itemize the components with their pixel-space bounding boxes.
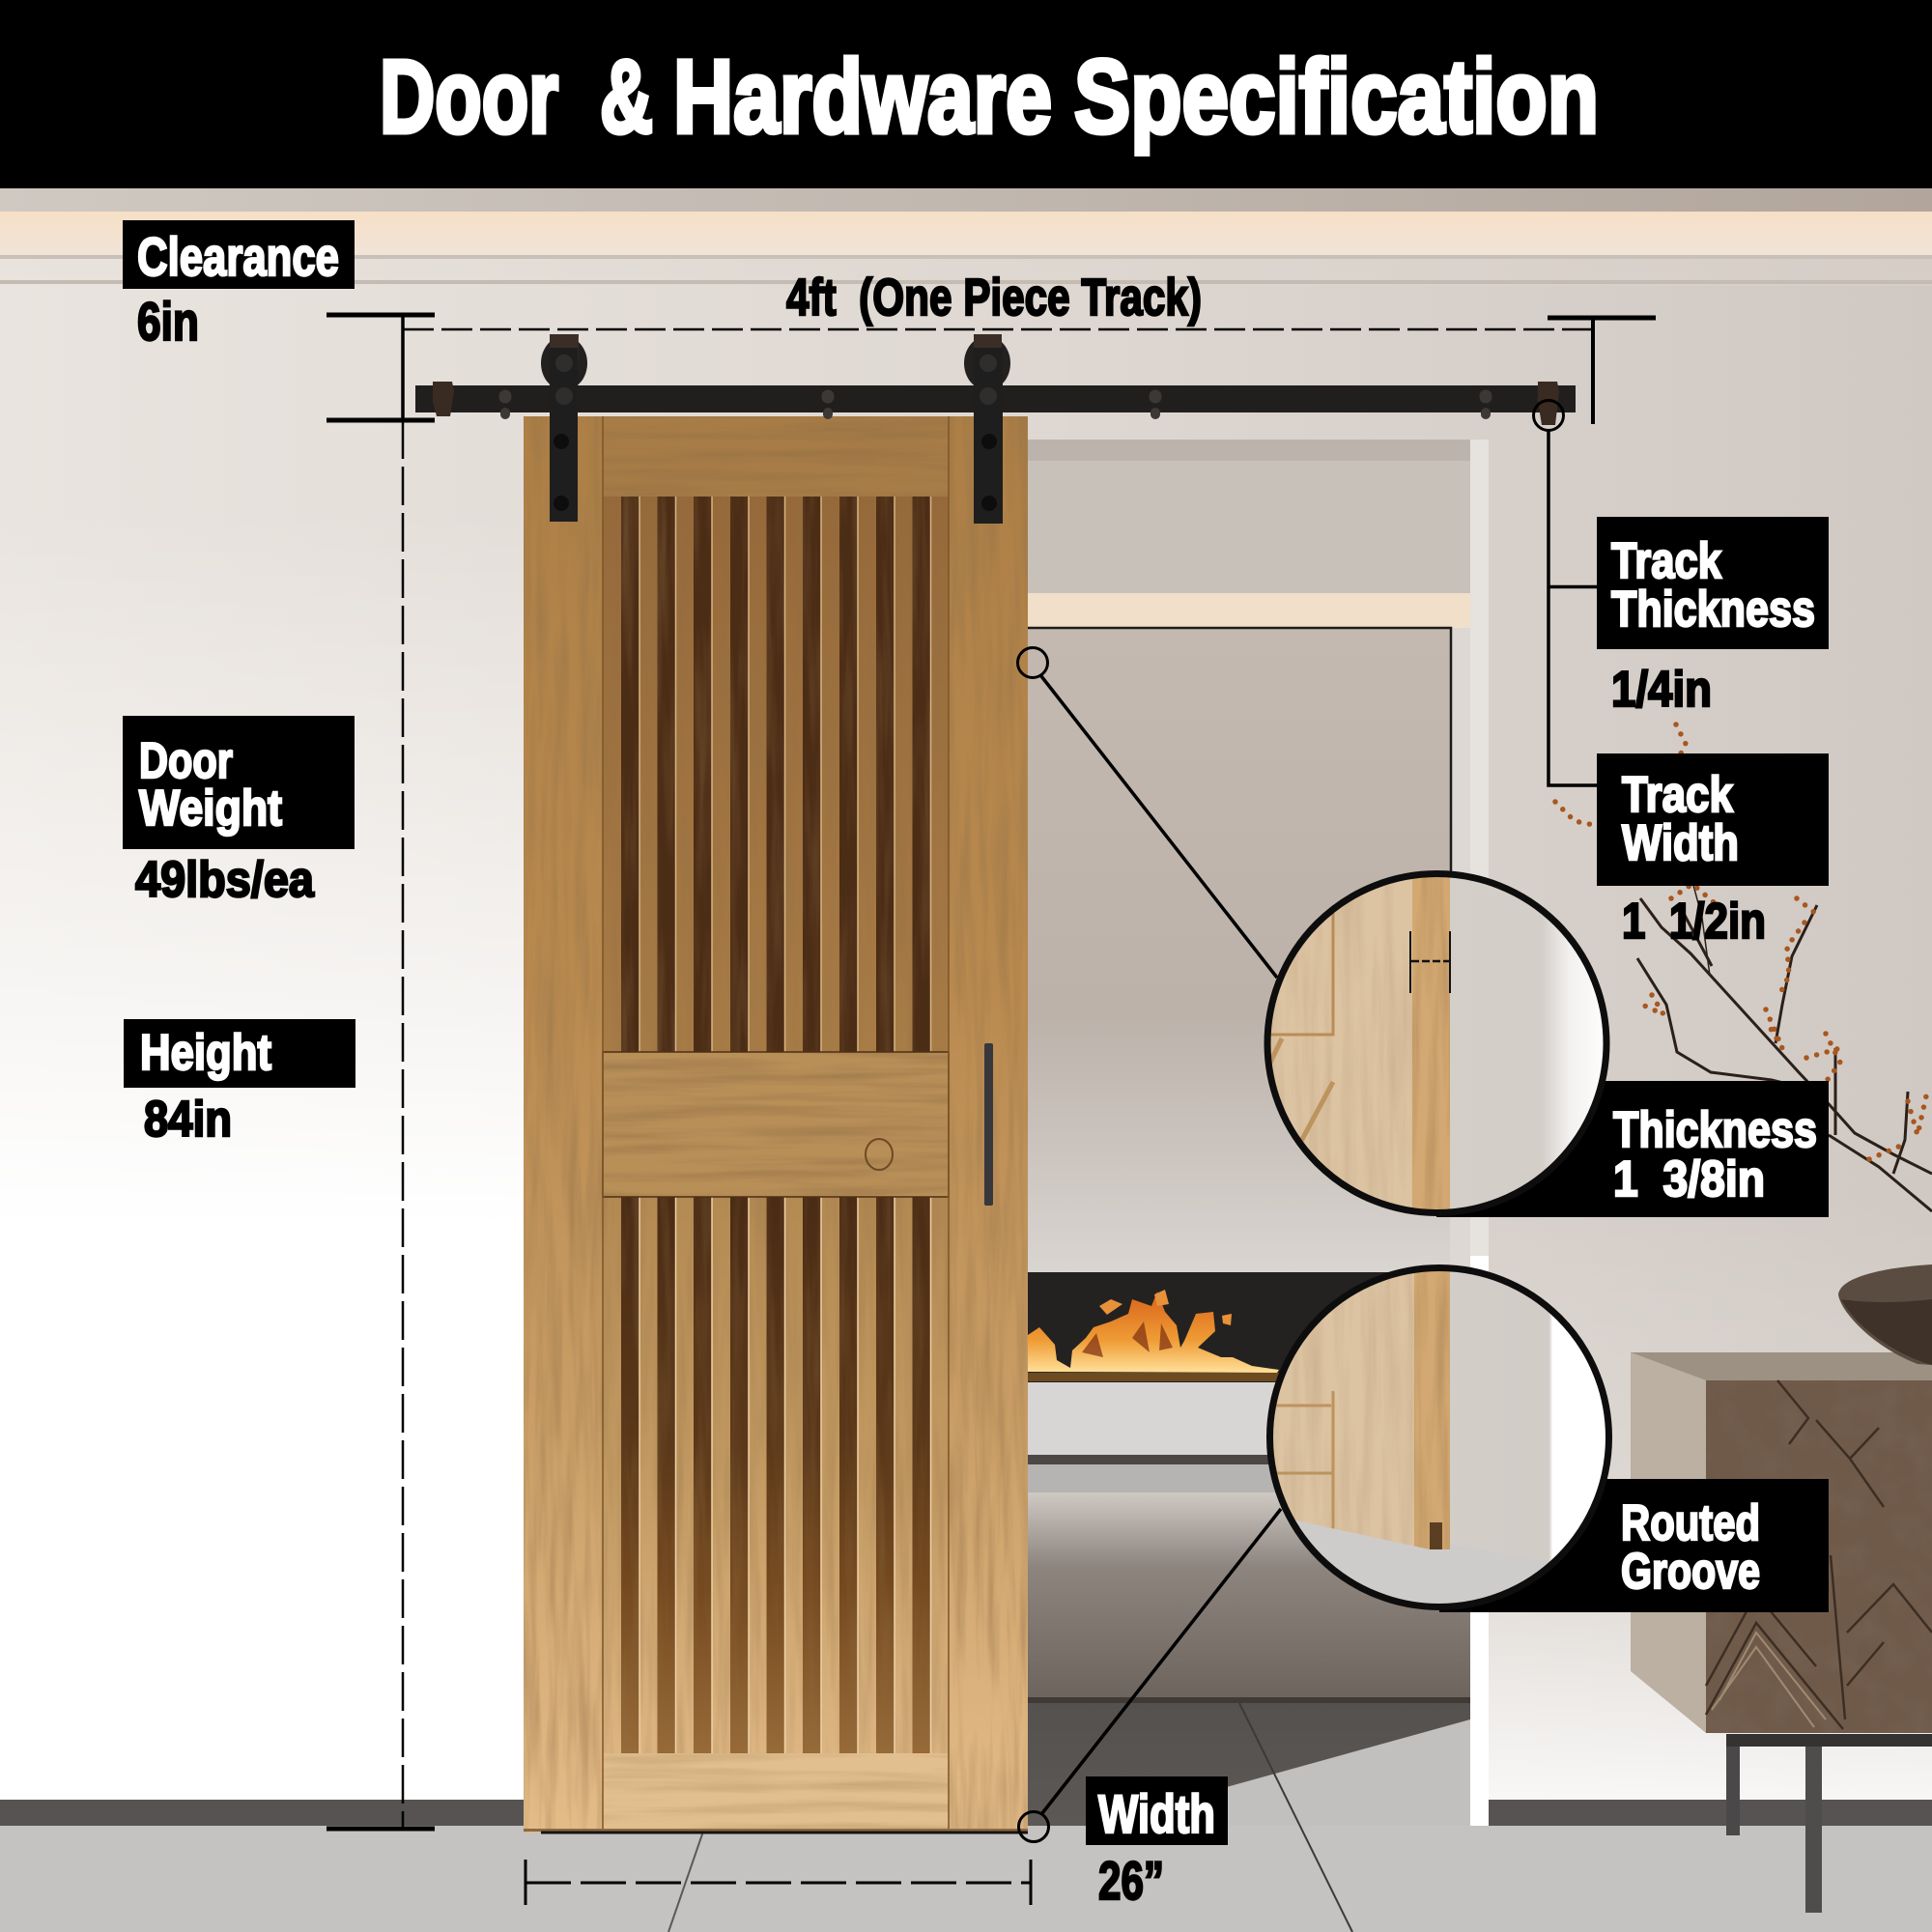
crown moulding	[0, 256, 1932, 286]
left hanger	[541, 334, 587, 522]
inner floor	[1028, 1703, 1470, 1826]
label: door weight: Door	[139, 733, 233, 789]
top rail	[603, 416, 949, 497]
title: &	[600, 38, 653, 155]
label: clearance: 6in	[137, 291, 199, 352]
label: track length: 4ft (One Piece Track)	[786, 269, 1202, 327]
track length dimension	[403, 318, 1656, 424]
label: track thickness: 1/4in	[1611, 662, 1712, 718]
bottom rail	[603, 1753, 949, 1830]
title: Hardware	[673, 38, 1052, 155]
slatted panel upper	[603, 497, 949, 1052]
cabinet side	[1631, 1352, 1706, 1733]
label: height: Height	[140, 1025, 271, 1081]
label: routed groove	[1439, 1479, 1829, 1612]
cabinet front	[1706, 1380, 1932, 1733]
label: thickness	[1436, 1081, 1829, 1217]
label: door weight	[123, 716, 355, 908]
label: track width: 1 1/2in	[1622, 894, 1766, 950]
title: Specification	[1074, 38, 1599, 155]
label: thickness: Thickness	[1613, 1102, 1817, 1158]
barn door	[524, 416, 1028, 1833]
slatted panel lower	[603, 1197, 949, 1753]
flames	[1028, 1292, 1279, 1373]
clearance dimension	[327, 315, 435, 420]
door thickness leader	[1018, 647, 1277, 978]
inset circle: routed groove detail	[1266, 1264, 1612, 1610]
floor	[0, 1826, 1932, 1932]
door trim	[1470, 440, 1489, 1826]
back wall	[1028, 628, 1450, 1273]
label: clearance: Clearance	[137, 226, 339, 287]
vase	[1838, 1264, 1932, 1365]
routed groove leader	[1018, 1509, 1281, 1841]
title: Door	[380, 38, 558, 155]
label: door weight: Weight	[139, 781, 282, 837]
fireplace	[1028, 1272, 1470, 1492]
right hanger	[964, 334, 1010, 524]
cabinet top	[1631, 1352, 1932, 1380]
cabinet legs	[1726, 1734, 1740, 1835]
doorway opening and room beyond	[1028, 440, 1489, 1932]
height dimension	[327, 420, 435, 1829]
thickness marker	[1410, 931, 1450, 993]
label: door weight: 49lbs/ea	[135, 852, 315, 908]
label: clearance	[123, 220, 355, 352]
cove light inside room	[1028, 593, 1470, 628]
width dimension	[526, 1860, 1031, 1905]
title bar	[0, 0, 1932, 188]
track bolts	[505, 396, 1486, 397]
label: routed groove: Groove	[1621, 1544, 1760, 1600]
label: track thickness	[1597, 517, 1829, 718]
left stopper	[433, 382, 454, 416]
right stopper	[1538, 382, 1559, 425]
label: track thickness: Track	[1611, 533, 1721, 589]
label: width	[1086, 1776, 1228, 1911]
label: height	[124, 1019, 355, 1148]
door handle	[984, 1043, 993, 1206]
label: track width: Width	[1622, 815, 1739, 871]
inset circle: door thickness detail	[1264, 869, 1611, 1217]
rug	[1028, 1492, 1470, 1702]
label: thickness: 1 3/8in	[1613, 1151, 1765, 1208]
track callout lines	[1534, 400, 1598, 785]
title	[380, 38, 1599, 155]
middle rail	[603, 1052, 949, 1197]
label: track width: Track	[1622, 767, 1733, 823]
cove light	[0, 212, 1932, 256]
left wall fade	[0, 286, 1028, 1803]
cabinet and vase	[1631, 1264, 1932, 1913]
label: track thickness: Thickness	[1611, 582, 1815, 638]
label: width: Width	[1098, 1783, 1215, 1844]
branches with berries	[1555, 724, 1932, 1211]
right wall fade	[1028, 286, 1932, 1803]
baseboard	[0, 1800, 1932, 1826]
label: height: 84in	[144, 1092, 232, 1148]
track rail	[415, 382, 1576, 425]
label: track width	[1597, 753, 1829, 950]
ceiling band	[0, 188, 1932, 212]
label: routed groove: Routed	[1621, 1495, 1760, 1551]
label: width: 26”	[1098, 1850, 1164, 1911]
